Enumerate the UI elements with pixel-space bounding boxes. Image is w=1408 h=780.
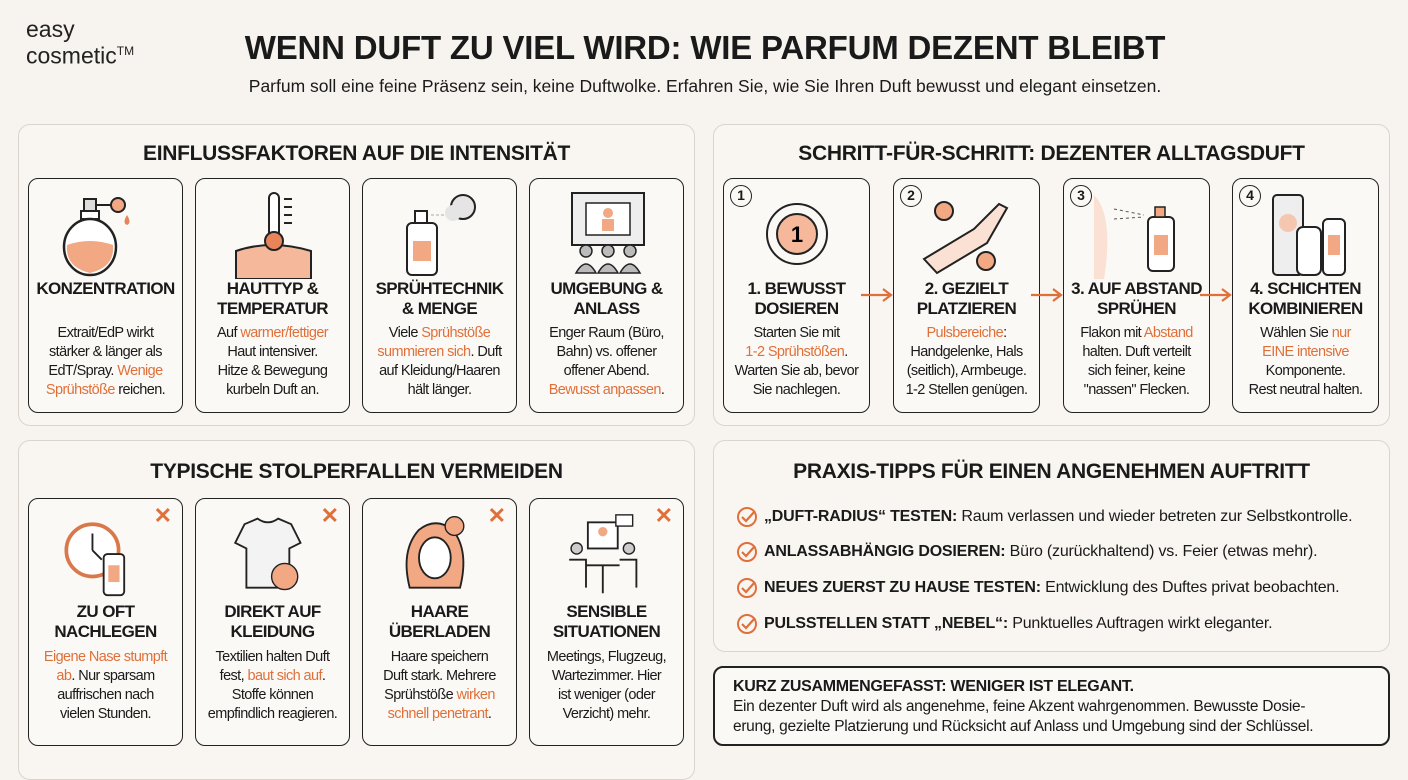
text (46, 325, 165, 398)
text: Viele Sprühstöße (389, 325, 490, 341)
title: 3. AUF ABSTAND (1071, 279, 1202, 298)
icon: room with people (571, 192, 645, 274)
icon: thermometer skin (235, 192, 312, 279)
title: 1. BEWUSST (748, 279, 845, 298)
text: 1-2 Sprühstößen. (745, 344, 848, 360)
card: step 2: 2 (907, 187, 915, 203)
text: Flakon mit Abstand (1080, 325, 1193, 341)
heading: Praxis-Tipps: PRAXIS-TIPPS FÜR EINEN ANGENEHMEN AUFTRITT (793, 460, 1310, 483)
summary box: KURZ ZUSAMMENGEFASST: WENIGER IST ELEGANT. (733, 678, 1134, 695)
title: KOMBINIEREN (1248, 299, 1363, 318)
text (906, 325, 1027, 398)
subtitle: Parfum soll eine feine Präsenz sein, keine Duftwolke. Erfahren Sie, wie Sie Ihren Duft bewusst und elegant einsetzen. (249, 76, 1161, 96)
text: Sprühstöße reichen. (46, 382, 165, 398)
card: step 3: 3 (1077, 187, 1085, 203)
text: EdT/Spray. Wenige (48, 363, 163, 379)
text: Bewusst anpassen. (549, 382, 664, 398)
text: ab. Nur sparsam (56, 668, 155, 684)
title (917, 279, 1016, 318)
text (383, 649, 496, 722)
text: sich feiner, keine (1088, 363, 1185, 379)
title (1071, 279, 1202, 318)
panel: Schritt-für-Schritt (713, 124, 1390, 426)
text: schnell penetrant. (388, 706, 491, 722)
title: KONZENTRATION (36, 279, 175, 298)
text (549, 325, 664, 398)
text: Komponente. (1266, 363, 1345, 379)
text: Hitze & Bewegung (218, 363, 327, 379)
summary box: Ein dezenter Duft wird als angenehme, feine Akzent wahrgenommen. Bewusste Dosie- (733, 698, 1305, 715)
text (1080, 325, 1193, 398)
heading: Einflussfaktoren: EINFLUSSFAKTOREN AUF DIE INTENSITÄT (143, 142, 570, 165)
text (217, 325, 328, 398)
card: step 1: 1 (737, 187, 745, 203)
text: Verzicht) mehr. (563, 706, 650, 722)
icon: meeting (569, 514, 638, 594)
card: step 4 (1232, 178, 1379, 413)
text: Pulsbereiche: (926, 325, 1007, 341)
summary box (713, 666, 1390, 746)
text: Sie nachlegen. (753, 382, 840, 398)
card: zu oft: ✕ (154, 503, 172, 528)
text: Eigene Nase stumpft (44, 649, 167, 665)
text: offener Abend. (564, 363, 649, 379)
text: kurbeln Duft an. (226, 382, 319, 398)
text: Haare speichern (391, 649, 488, 665)
title: ZU OFT (77, 602, 134, 621)
title: ÜBERLADEN (389, 622, 490, 641)
tip 1: „DUFT-RADIUS“ TESTEN: Raum verlassen und wieder betreten zur Selbstkontrolle. (764, 508, 1352, 525)
icon: spray distance (1094, 195, 1175, 279)
title: HAARE (411, 602, 468, 621)
text (1249, 325, 1362, 398)
icon: hair (406, 516, 464, 589)
icon: dosage dial (766, 203, 828, 265)
panel: Praxis-Tipps (713, 440, 1390, 652)
text: Warten Sie ab, bevor (735, 363, 858, 379)
title (376, 279, 504, 318)
text: Textilien halten Duft (216, 649, 329, 665)
text: Wartezimmer. Hier (552, 668, 661, 684)
text: "nassen" Flecken. (1084, 382, 1189, 398)
title: NACHLEGEN (54, 622, 157, 641)
title (217, 279, 328, 318)
title: TEMPERATUR (217, 299, 328, 318)
text (547, 649, 666, 722)
title: HAUTTYP & (227, 279, 318, 298)
text: 1-2 Stellen genügen. (906, 382, 1027, 398)
card: Situationen: ✕ (655, 503, 673, 528)
title (748, 279, 846, 318)
text (377, 325, 502, 398)
card: Kleidung: ✕ (321, 503, 339, 528)
card: step 4: 4 (1246, 187, 1254, 203)
title (224, 602, 321, 641)
title: SPRÜHTECHNIK (376, 279, 503, 298)
text: Haut intensiver. (227, 344, 318, 360)
icon: hand wrist (922, 201, 1008, 274)
card: Sprühtechnik (362, 178, 517, 413)
title: UMGEBUNG & (550, 279, 663, 298)
logo: cosmeticTM (26, 43, 134, 69)
title (1248, 279, 1363, 318)
icon: clock spray (64, 522, 126, 596)
card: Haare: ✕ (488, 503, 506, 528)
heading: Stolperfallen: TYPISCHE STOLPERFALLEN VERMEIDEN (150, 460, 563, 483)
text: ist weniger (oder (558, 687, 655, 703)
title: WENN DUFT ZU VIEL WIRD: WIE PARFUM DEZENT BLEIBT (245, 29, 1165, 66)
text: Meetings, Flugzeug, (547, 649, 666, 665)
title: & MENGE (402, 299, 477, 318)
text: EINE intensive (1262, 344, 1349, 360)
panel: Einflussfaktoren (18, 124, 695, 426)
icon: t-shirt (234, 518, 302, 590)
text: stärker & länger als (49, 344, 162, 360)
title: 4. SCHICHTEN (1250, 279, 1361, 298)
text: summieren sich. Duft (377, 344, 502, 360)
title: ANLASS (573, 299, 640, 318)
title: SPRÜHEN (1097, 299, 1176, 318)
panel: Stolperfallen (18, 440, 695, 780)
icon: perfume bottle (62, 197, 130, 276)
text: auf Kleidung/Haaren (379, 363, 500, 379)
text: halten. Duft verteilt (1082, 344, 1191, 360)
text: Wählen Sie nur (1260, 325, 1351, 341)
title: PLATZIEREN (917, 299, 1016, 318)
card: zu oft (28, 498, 183, 746)
text: Sprühstöße wirken (384, 687, 495, 703)
text (44, 649, 168, 722)
text: Auf warmer/fettiger (217, 325, 328, 341)
text (734, 325, 859, 398)
text: Stoffe können (232, 687, 313, 703)
tip 2: ANLASSABHÄNGIG DOSIEREN: Büro (zurückhaltend) vs. Feier (etwas mehr). (764, 543, 1317, 560)
text: fest, baut sich auf. (220, 668, 325, 684)
title: 2. GEZIELT (925, 279, 1008, 298)
icon: dosage dial: 1 (791, 222, 803, 247)
icon: layered products (1272, 194, 1346, 276)
title: DIREKT AUF (224, 602, 321, 621)
text: Extrait/EdP wirkt (58, 325, 153, 341)
card: step 1 (723, 178, 870, 413)
text: Enger Raum (Büro, (549, 325, 664, 341)
tip 4: PULSSTELLEN STATT „NEBEL“: Punktuelles Auftragen wirkt eleganter. (764, 615, 1272, 632)
title (550, 279, 663, 318)
card: Konzentration (28, 178, 183, 413)
card: step 3 (1063, 178, 1210, 413)
text: Bahn) vs. offener (557, 344, 656, 360)
logo: easy (26, 16, 75, 42)
title (54, 602, 157, 641)
summary box: erung, gezielte Platzierung und Rücksicht auf Anlass und Umgebung sind der Schlüssel. (733, 718, 1313, 735)
text: auffrischen nach (57, 687, 154, 703)
title: KLEIDUNG (230, 622, 314, 641)
text (208, 649, 337, 722)
title: SENSIBLE (566, 602, 647, 621)
icon: spray (406, 194, 476, 276)
text: (seitlich), Armbeuge. (907, 363, 1026, 379)
text: Starten Sie mit (753, 325, 840, 341)
arrow (1200, 288, 1232, 302)
title (553, 602, 660, 641)
text: hält länger. (408, 382, 471, 398)
card: Hauttyp (195, 178, 350, 413)
text: Duft stark. Mehrere (383, 668, 496, 684)
tip 3: NEUES ZUERST ZU HAUSE TESTEN: Entwicklung des Duftes privat beobachten. (764, 579, 1339, 596)
heading: Schritte: SCHRITT-FÜR-SCHRITT: DEZENTER ALLTAGSDUFT (798, 142, 1305, 165)
card: step 2 (893, 178, 1040, 413)
card: Umgebung (529, 178, 684, 413)
arrow (861, 288, 893, 302)
card: Haare (362, 498, 517, 746)
title (389, 602, 490, 641)
text: empfindlich reagieren. (208, 706, 337, 722)
text: Rest neutral halten. (1249, 382, 1362, 398)
logo (26, 16, 134, 69)
card: Situationen (529, 498, 684, 746)
title: SITUATIONEN (553, 622, 660, 641)
text: Handgelenke, Hals (910, 344, 1023, 360)
text: vielen Stunden. (60, 706, 151, 722)
title: DOSIEREN (754, 299, 838, 318)
card: Kleidung (195, 498, 350, 746)
arrow (1031, 288, 1063, 302)
